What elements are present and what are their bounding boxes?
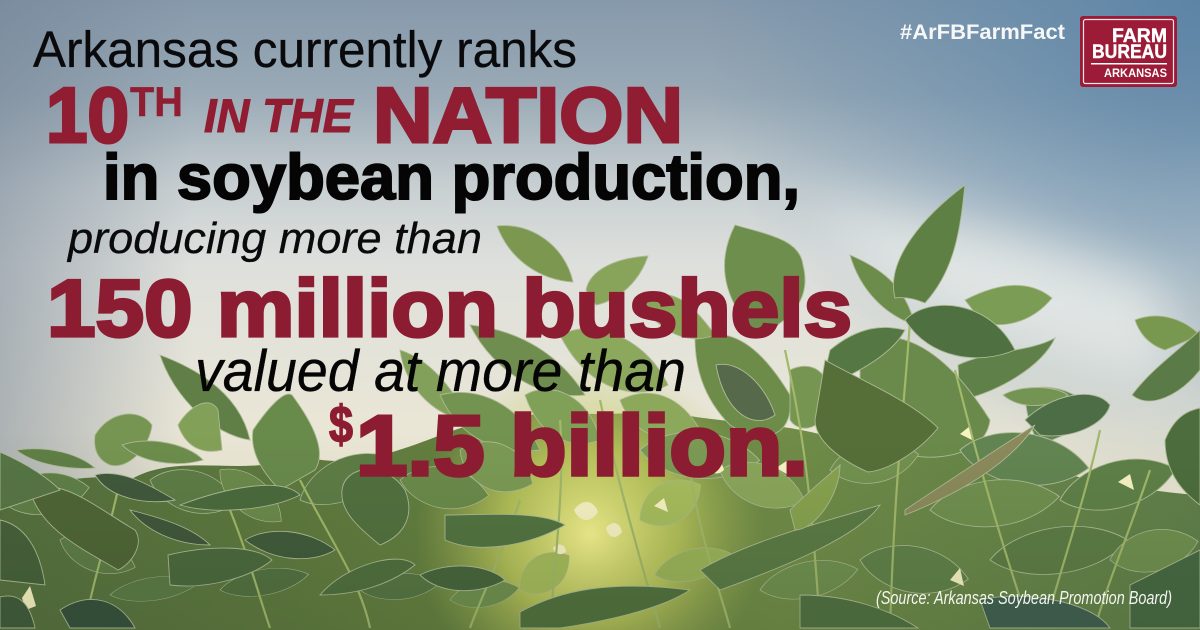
light gaps between leaves: [22, 426, 1134, 610]
line: 150 million bushels: 150 million bushels: [47, 264, 852, 354]
logo: Farm Bureau Arkansas: ARKANSAS: [1104, 66, 1167, 80]
dark foreground leaves: [0, 185, 1200, 628]
stems: [85, 320, 1150, 628]
hashtag: #ArFBFarmFact: [900, 21, 1065, 44]
soybean plant photo illustration: [0, 185, 1200, 630]
shading: [0, 430, 1200, 630]
lower mid-tone leaves: [0, 425, 1200, 613]
logo: Farm Bureau Arkansas: BUREAU: [1092, 42, 1167, 63]
line: 10th in the nation: TH: [130, 78, 183, 125]
line: producing more than: producing more than: [66, 214, 482, 263]
foliage mass: [0, 410, 1200, 630]
line: 10th in the nation: [46, 71, 683, 159]
line: $1.5 billion: 1.5 billion.: [356, 399, 808, 494]
line: valued at more than: valued at more than: [195, 339, 686, 404]
line: in soybean production: in soybean production,: [103, 141, 800, 213]
heading text block: [33, 21, 852, 494]
line: $1.5 billion: $: [329, 396, 353, 454]
line: 10th in the nation: IN THE: [204, 89, 355, 142]
logo: Farm Bureau Arkansas: FARM: [1112, 25, 1167, 47]
line: 10th in the nation: 10: [46, 71, 129, 159]
upper mid-tone leaves: [16, 225, 1200, 490]
line: Arkansas currently ranks: Arkansas currently ranks: [33, 21, 577, 78]
line: 10th in the nation: NATION: [373, 71, 683, 159]
sunlight glow through leaves: [415, 360, 765, 630]
logo: Farm Bureau Arkansas: [1080, 16, 1177, 87]
